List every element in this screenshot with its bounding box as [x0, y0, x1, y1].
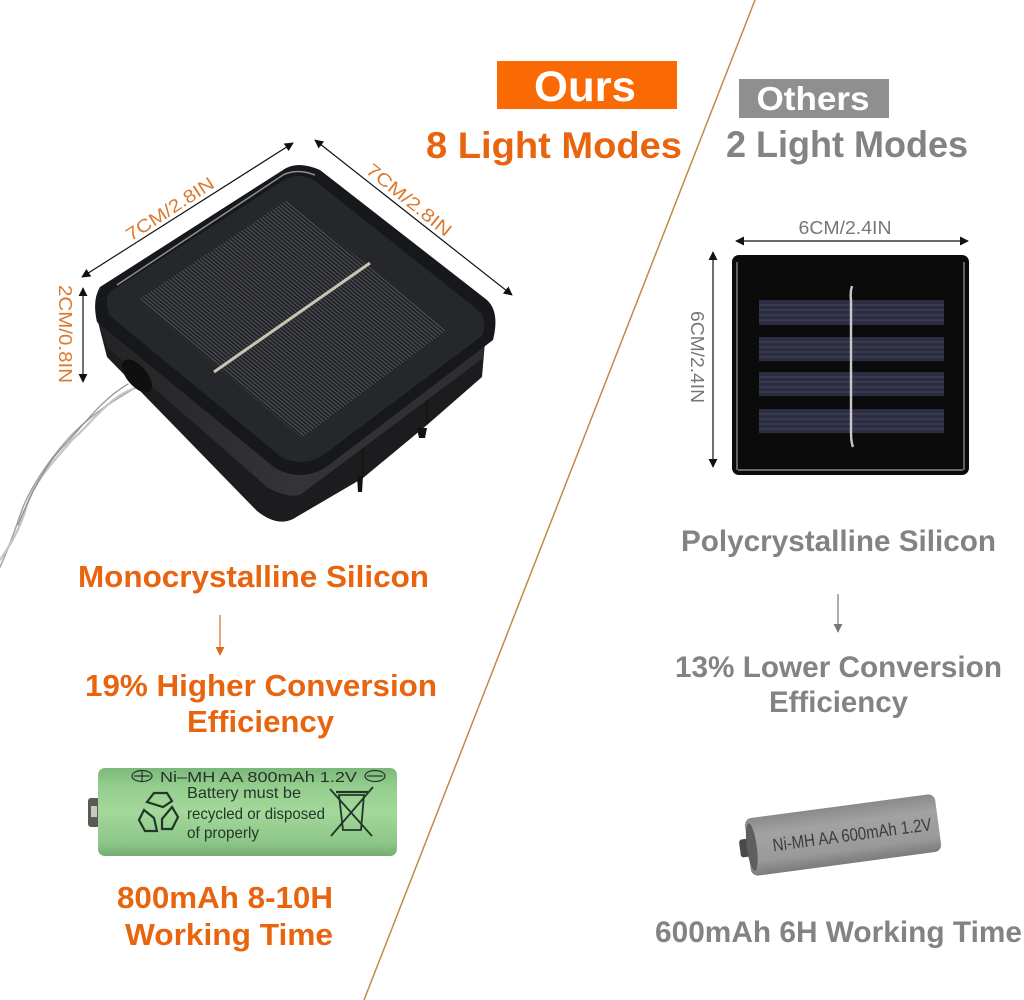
dimension: top-right width — [315, 140, 512, 295]
diagonal divider — [364, 0, 755, 1000]
heading: Others badge: Others — [756, 80, 870, 117]
battery notice: of properly — [187, 825, 259, 842]
ours solar box product photo — [0, 165, 495, 567]
wire — [0, 384, 140, 567]
battery body — [98, 768, 397, 856]
battery terminal — [88, 798, 100, 827]
dimension: height — [55, 285, 83, 383]
strip lines — [759, 305, 944, 429]
dimension: height: 2CM/0.8IN — [55, 285, 75, 383]
icon: crossed-out bin — [330, 787, 373, 836]
busbar — [214, 263, 370, 372]
solar strips — [759, 300, 944, 433]
dimension: others width: 6CM/2.4IN — [798, 218, 892, 238]
arrow: orange — [219, 615, 221, 655]
text: 19% Higher Conversion Efficiency: Efficiency — [187, 704, 335, 739]
heading: 8 Light Modes: 8 Light Modes — [426, 125, 682, 166]
dimension: top-left width: 7CM/2.8IN — [122, 173, 218, 245]
arrow: grey — [837, 594, 839, 632]
text: 800mAh 8-10H Working Time: 800mAh 8-10H — [117, 880, 333, 915]
box lip band — [97, 318, 486, 496]
battery top line: Ni–MH AA 800mAh 1.2V — [160, 769, 357, 786]
text: 600mAh 6H Working Time: 600mAh 6H Working Time — [655, 916, 1022, 949]
text: 800mAh 8-10H Working Time: Working Time — [125, 917, 333, 952]
green battery — [88, 768, 397, 856]
top frame — [95, 165, 495, 475]
text: Polycrystalline Silicon: Polycrystalline Silicon — [681, 525, 996, 558]
text: 19% Higher Conversion Efficiency: 19% Higher Conversion — [85, 668, 437, 703]
text: 13% Lower Conversion Efficiency: Efficiency — [769, 686, 908, 719]
frame highlight — [117, 172, 315, 285]
dimension: top-left width — [82, 143, 293, 277]
box lower body — [97, 318, 486, 522]
top panel — [107, 176, 484, 462]
others solar panel product photo — [732, 255, 969, 475]
box seams — [363, 400, 427, 476]
text: 19% Higher Conversion Efficiency — [85, 668, 437, 739]
battery notice — [187, 785, 325, 842]
icon: recycle — [139, 793, 178, 831]
polarity icons — [132, 770, 385, 782]
grey battery — [736, 794, 942, 877]
text: 13% Lower Conversion Efficiency: 13% Lower Conversion — [675, 651, 1002, 684]
heading: Ours badge: Ours — [534, 63, 636, 111]
center wire — [851, 286, 853, 447]
solar cell — [138, 200, 447, 438]
panel frame — [732, 255, 969, 475]
text: 800mAh 8-10H Working Time — [117, 880, 333, 952]
heading: Ours badge — [497, 61, 677, 111]
cable connector — [116, 354, 158, 398]
text: Monocrystalline Silicon: Monocrystalline Silicon — [78, 559, 429, 594]
text: 13% Lower Conversion Efficiency — [675, 651, 1002, 719]
battery body — [744, 794, 942, 876]
battery notice: Battery must be — [187, 785, 301, 802]
dimension: top-right width: 7CM/2.8IN — [362, 160, 456, 240]
battery notice: recycled or disposed — [187, 806, 325, 823]
battery label: Ni-MH AA 600mAh 1.2V — [771, 814, 933, 855]
dimension: others height: 6CM/2.4IN — [687, 311, 707, 403]
heading: Others badge — [739, 79, 889, 118]
box tabs — [357, 428, 427, 492]
battery terminal — [739, 838, 753, 858]
heading: 2 Light Modes: 2 Light Modes — [726, 124, 968, 165]
